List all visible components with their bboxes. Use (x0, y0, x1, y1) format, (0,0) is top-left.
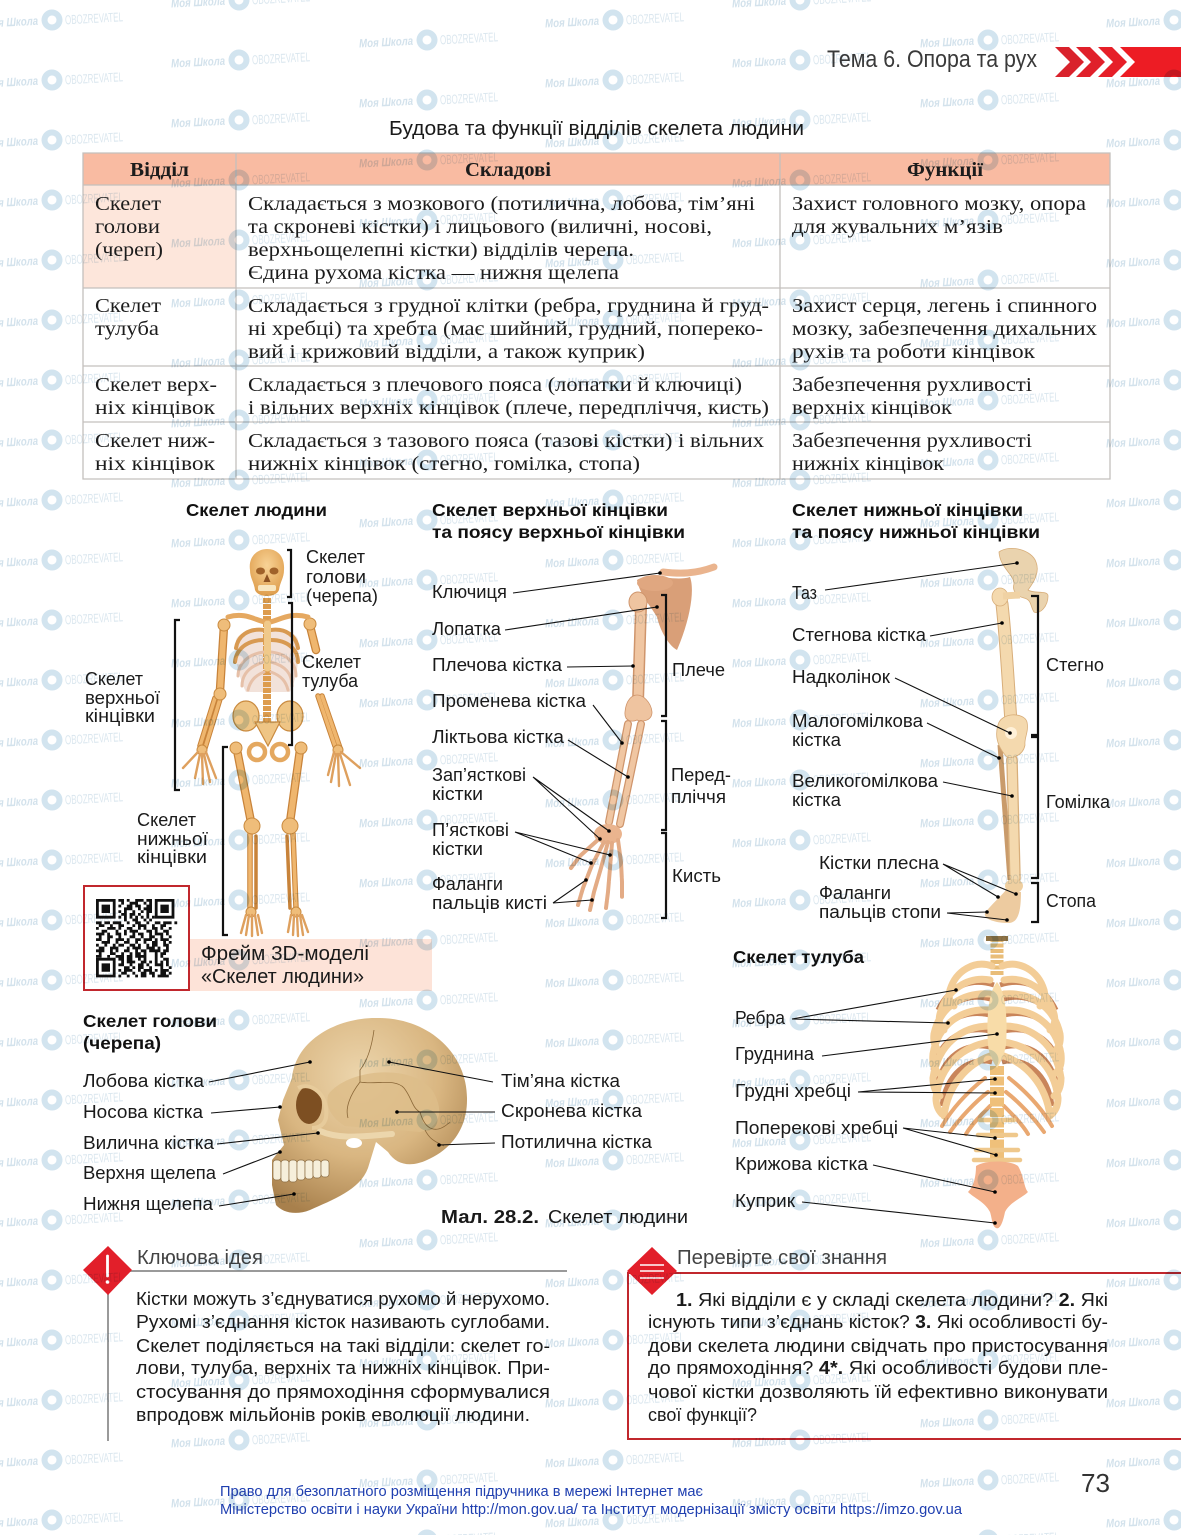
heading: skull: Скелет голови (83, 1011, 217, 1031)
figure caption (441, 1206, 688, 1227)
questions text: 1. Які відділи є у складі скелета людини? 2. Які (676, 1289, 1108, 1310)
metacarpals and fingers (571, 838, 622, 910)
labels and leader lines: Лопатка (432, 618, 502, 639)
footer rights notice: Право для безоплатного розміщення підручника в мережі Інтернет має (220, 1484, 704, 1500)
labels and leader lines: Зап’ясткові (432, 764, 526, 785)
QR code (96, 900, 177, 976)
labels and leader lines: пальців стопи (819, 901, 941, 922)
labels and leader lines: Нижня щелепа (83, 1193, 214, 1214)
table: skeleton divisions (83, 153, 1110, 479)
forearms and shins highlight (200, 696, 340, 908)
jaw opening (346, 1138, 362, 1148)
skull (250, 549, 284, 596)
panel: upper limb (432, 500, 731, 918)
heading: lower limb: Скелет нижньої кінцівки (792, 500, 1023, 520)
labels: leg segments (1046, 654, 1111, 911)
knee (997, 715, 1027, 758)
transverse processes (974, 1120, 1020, 1160)
heading: skull (83, 1011, 217, 1053)
joints (197, 618, 343, 917)
row: lower limbs (95, 430, 1032, 475)
row: head skeleton: Складається з мозкового (потилична, лобова, тім’яні (248, 193, 755, 215)
cranium and jaw (272, 1018, 467, 1213)
key idea text: Кістки можуть з’єднуватися рухомо й нерухомо. (136, 1288, 550, 1309)
questions text: дови скелета людини свідчать про пристосування (648, 1335, 1108, 1356)
heading: upper limb: та поясу верхньої кінцівки (432, 522, 685, 542)
label: trunk skeleton: тулуба (302, 670, 359, 691)
panel: trunk skeleton (733, 936, 1061, 1228)
labels and leader lines: Носова кістка (83, 1101, 204, 1122)
lumbar spine (990, 1066, 1004, 1168)
tibia highlight (1012, 760, 1015, 878)
row: head skeleton: Захист головного мозку, опора (792, 193, 1086, 215)
ilium bones (233, 701, 303, 746)
illustration: skull side view (272, 1018, 467, 1213)
caption background (189, 939, 432, 991)
thin shafts (256, 836, 290, 908)
illustration: rib cage and spine (933, 936, 1061, 1228)
bracket: head (287, 550, 291, 597)
label: upper limb skeleton: Скелет (85, 668, 144, 689)
table header row: Відділ (130, 159, 189, 181)
forearm highlight (609, 724, 641, 824)
QR caption (201, 943, 369, 988)
labels and leader lines: Потилична кістка (501, 1131, 653, 1152)
row: trunk skeleton: ні хребці) та хребта (має шийний, грудний, попереко- (248, 318, 763, 340)
row: lower limbs: нижніх кінцівок (792, 453, 944, 475)
row: lower limbs: Скелет ниж- (95, 430, 215, 452)
heading: lower limb (792, 500, 1040, 542)
fibula (1000, 745, 1010, 880)
QR frame (84, 886, 189, 990)
questions text (648, 1289, 1108, 1425)
labels and leader lines: Фаланги (819, 882, 891, 903)
row: trunk skeleton: Скелет (95, 295, 161, 317)
labels: leg segments: Гомілка (1046, 791, 1111, 812)
key idea text: Рухомі з’єднання кісток називають суглобами. (136, 1311, 550, 1332)
labels: arm segments: Кисть (672, 865, 721, 886)
QR caption: «Скелет людини» (201, 966, 364, 988)
labels and leader lines: кістка (792, 729, 842, 750)
arms and legs underlay (220, 626, 316, 822)
humerus head (629, 592, 647, 612)
femur neck (1003, 595, 1020, 596)
labels and leader lines: кістки (432, 783, 483, 804)
sacrum and coccyx (968, 1162, 1028, 1228)
footer rights notice: Міністерство освіти і науки України http://mon.gov.ua/ та Інститут модернізації змісту освіти https://imzo.gov.ua (220, 1502, 963, 1518)
questions text: чової кістки дозволяють їй ефективно виконувати (648, 1381, 1108, 1402)
label: upper limb skeleton (85, 668, 160, 726)
labels and leader lines: Таз (792, 582, 817, 603)
labels and leader lines: Стегнова кістка (792, 624, 927, 645)
row: lower limbs: Забезпечення рухливості (792, 430, 1032, 452)
arm shafts highlight (638, 606, 641, 702)
clavicle (663, 567, 714, 573)
zygomatic arch (320, 1131, 392, 1137)
label: head skeleton: (черепа) (306, 585, 378, 606)
labels and leader lines: Фаланги (432, 873, 503, 894)
labels and leader lines (792, 561, 1019, 922)
icon: exclamation diamond (83, 1246, 132, 1295)
row: trunk skeleton: вий і крижовий відділи, а також куприк) (248, 341, 645, 363)
rib cage backing (236, 629, 299, 692)
forearm underlay (609, 724, 641, 824)
labels: arm segments: Перед- (671, 764, 731, 785)
key idea text: Скелет поділяється на такі відділи: скелет го- (136, 1335, 550, 1356)
label: lower limb skeleton: нижньої (137, 828, 208, 849)
patella (1005, 727, 1017, 739)
bracket: trunk (288, 603, 292, 745)
page number: 73 (1081, 1468, 1110, 1498)
label: trunk skeleton: Скелет (302, 651, 362, 672)
rib cage (228, 615, 308, 690)
QR block (84, 886, 432, 991)
panel: human skeleton (85, 500, 378, 936)
row: trunk skeleton: Захист серця, легень і спинного (792, 295, 1097, 317)
chapter title: Тема 6. Опора та рух (827, 46, 1037, 73)
label: lower limb skeleton (137, 809, 208, 867)
labels and leader lines: Верхня щелепа (83, 1162, 217, 1183)
key idea text (136, 1288, 550, 1425)
left ribs (933, 964, 994, 1134)
cervical spine (990, 938, 1004, 975)
illustration: full skeleton (183, 549, 360, 936)
teeth (273, 1160, 329, 1182)
label: upper limb skeleton: верхньої (85, 687, 160, 708)
labels and leader lines: Куприк (735, 1190, 796, 1211)
labels and leader lines: Променева кістка (432, 690, 587, 711)
neck top (986, 936, 1008, 941)
table header row (83, 153, 1110, 185)
labels and leader lines: пальців кисті (432, 892, 547, 913)
right ribs (1000, 964, 1061, 1134)
label: head skeleton (306, 546, 378, 606)
bracket: upper limb (175, 620, 180, 790)
labels and leader lines (432, 571, 662, 913)
labels and leader lines: Великогомілкова (792, 770, 939, 791)
labels and leader lines: Ключиця (432, 581, 507, 602)
brackets: arm segments (661, 595, 666, 918)
sutures (347, 1030, 450, 1146)
illustration: arm bones (571, 567, 714, 910)
labels and leader lines: Плечова кістка (432, 654, 563, 675)
row: head skeleton: для жувальних м’язів (792, 216, 1003, 238)
labels and leader lines: Поперекові хребці (735, 1117, 898, 1138)
row: lower limbs: ніх кінцівок (95, 453, 215, 475)
eye rim (298, 1086, 326, 1128)
labels and leader lines: Надколінок (792, 666, 891, 687)
row: upper limbs: Скелет верх- (95, 374, 217, 396)
table title: Будова та функції відділів скелета людини (389, 118, 804, 140)
row: head skeleton: Єдина рухома кістка — нижня щелепа (248, 262, 619, 284)
row: upper limbs: ніх кінцівок (95, 397, 215, 419)
labels and leader lines: Тім’яна кістка (501, 1070, 621, 1091)
footer rights notice (220, 1484, 963, 1518)
panel: check your knowledge (627, 1247, 1181, 1439)
labels and leader lines: кістка (792, 789, 842, 810)
temporal region (327, 1072, 439, 1132)
row: lower limbs: Складається з тазового пояса (тазові кістки) і вільних (248, 430, 764, 452)
icon: list diamond (627, 1247, 677, 1295)
labels: arm segments: пліччя (671, 786, 726, 807)
row: lower limbs: нижніх кінцівок (стегно, гомілка, стопа) (248, 453, 640, 475)
labels and leader lines: Малогомілкова (792, 710, 924, 731)
heading: upper limb: Скелет верхньої кінцівки (432, 500, 668, 520)
labels and leader lines: Кістки плесна (819, 852, 940, 873)
arm shafts underlay (638, 606, 641, 702)
heading: lower limb: та поясу нижньої кінцівки (792, 522, 1040, 542)
row: head skeleton: Скелет (95, 193, 161, 215)
labels: arm segments: Плече (672, 659, 725, 680)
heading: human skeleton: Скелет людини (186, 500, 327, 520)
pelvis (999, 548, 1048, 613)
row: upper limbs: Забезпечення рухливості (792, 374, 1032, 396)
key idea text: лови, тулуба, верхніх та нижніх кінцівок. При- (136, 1357, 550, 1378)
row: head skeleton: голови (95, 216, 160, 238)
table header row: Складові (465, 159, 551, 181)
row: head skeleton: верхньощелепні кістки) відділів черепа. (248, 239, 634, 261)
panel: head skeleton (83, 1011, 653, 1214)
heading: upper limb (432, 500, 685, 542)
row: upper limbs: верхніх кінцівок (792, 397, 952, 419)
panel: lower limb (792, 500, 1111, 923)
label: lower limb skeleton: Скелет (137, 809, 197, 830)
row: upper limbs (95, 374, 1032, 419)
label: lower limb skeleton: кінцівки (137, 846, 207, 867)
row: trunk skeleton: мозку, забезпечення дихальних (792, 318, 1097, 340)
labels: leg segments: Стопа (1046, 890, 1097, 911)
heading: key idea: Ключова ідея (137, 1247, 263, 1269)
row: head skeleton: (череп) (95, 239, 163, 261)
row: head skeleton (95, 193, 1086, 284)
row: head skeleton: та скроневі кістки) і лицьового (виличні, носові, (248, 216, 712, 238)
row: upper limbs: Складається з плечового пояса (лопатки й ключиці) (248, 374, 742, 396)
bracket: lower limb (223, 747, 228, 935)
femur head (992, 588, 1008, 606)
spine (263, 598, 271, 722)
labels and leader lines (83, 1060, 653, 1214)
figure caption: Скелет людини (548, 1206, 688, 1227)
questions text: існують типи з’єднань кісток? 3. Які особливості бу- (648, 1311, 1108, 1332)
femur highlight (1002, 604, 1011, 722)
panel: key idea (83, 1246, 567, 1441)
questions text: до прямоходіння? 4*. Які особливості будови пле- (648, 1357, 1108, 1378)
row: trunk skeleton: Складається з грудної клітки (ребра, груднина й груд- (248, 295, 769, 317)
row: trunk skeleton (95, 295, 1097, 363)
key idea text: стосування до прямоходіння сформувалися (136, 1381, 550, 1402)
hands and feet (183, 752, 360, 936)
pubic rings (249, 744, 288, 760)
labels and leader lines: Грудні хребці (735, 1080, 851, 1101)
key idea text: впродовж мільйонів років еволюції людини. (136, 1404, 530, 1425)
labels and leader lines: кістки (432, 838, 483, 859)
eye socket (296, 1086, 322, 1124)
heading: skull: (черепа) (83, 1033, 161, 1053)
labels and leader lines: Скронева кістка (501, 1100, 643, 1121)
red frame (628, 1273, 1181, 1439)
table header row: Функції (907, 159, 983, 181)
elbow end (625, 695, 652, 721)
chapter header (827, 46, 1181, 77)
labels and leader lines: П’ясткові (432, 819, 509, 840)
labels: leg segments: Стегно (1046, 654, 1104, 675)
labels and leader lines: Ліктьова кістка (432, 726, 565, 747)
brackets: leg segments (1031, 596, 1038, 922)
scapula (637, 577, 692, 650)
labels and leader lines: Лобова кістка (83, 1070, 205, 1091)
label: head skeleton: голови (306, 566, 366, 587)
red chevron bar (1055, 47, 1181, 77)
labels and leader lines: Ребра (735, 1007, 786, 1028)
label: trunk skeleton (302, 651, 362, 691)
row: upper limbs: і вільних верхніх кінцівок (плече, передпліччя, кисть) (248, 397, 769, 419)
QR caption: Фрейм 3D-моделі (201, 943, 369, 965)
arms and legs highlight (220, 626, 316, 822)
sternum (987, 982, 1007, 1068)
labels and leader lines: Крижова кістка (735, 1153, 869, 1174)
wrist (594, 824, 622, 844)
questions text: свої функції? (648, 1404, 757, 1425)
labels and leader lines: Груднина (735, 1043, 815, 1064)
labels: arm segments (671, 659, 731, 886)
tibia underlay (1012, 760, 1015, 878)
acromion (637, 575, 673, 591)
label: upper limb skeleton: кінцівки (85, 705, 155, 726)
rule lines (108, 1271, 567, 1441)
illustration: leg bones (985, 548, 1048, 923)
heading: trunk: Скелет тулуба (733, 947, 864, 967)
labels and leader lines: Вилична кістка (83, 1132, 215, 1153)
forearms and shins underlay (200, 696, 340, 908)
label: head skeleton: Скелет (306, 546, 366, 567)
figure caption: Мал. 28.2. (441, 1206, 539, 1227)
row: trunk skeleton: тулуба (95, 318, 159, 340)
heading: check knowledge: Перевірте свої знання (677, 1247, 887, 1269)
femur underlay (1002, 604, 1011, 722)
foot (985, 890, 1021, 923)
row: trunk skeleton: рухів та роботи кінцівок (792, 341, 1035, 363)
labels and leader lines (735, 988, 999, 1225)
ankle (1005, 879, 1023, 893)
